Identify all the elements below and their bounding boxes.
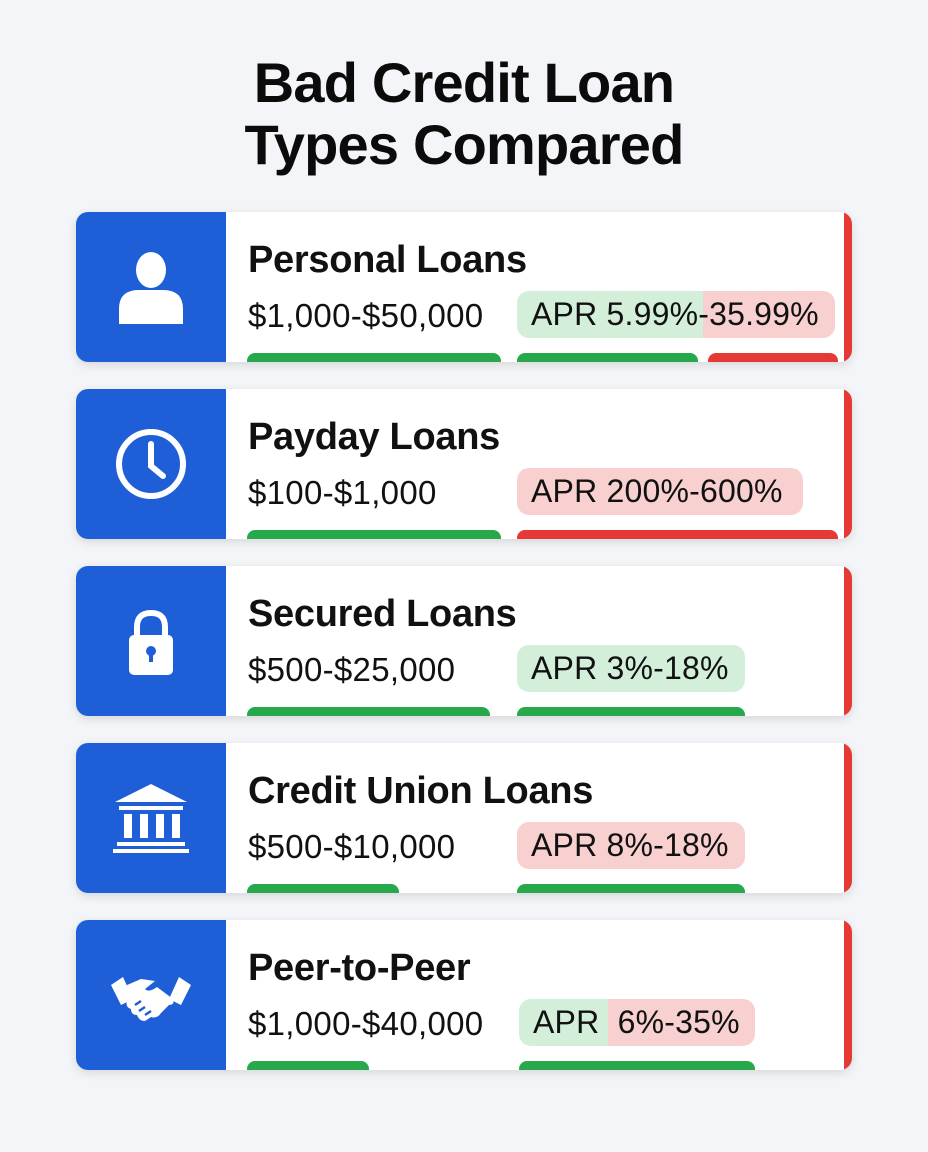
APR pill [517,291,835,338]
APR pill: APR 3%-18% [531,650,729,686]
APR pill: APR 6%-35% [533,1004,740,1040]
APR pill: APR 200%-600% [531,473,783,509]
panel: payday loans [76,389,852,539]
icon: handshake [76,920,226,1070]
title [244,51,684,176]
icon: clock [76,389,226,539]
heading: Secured Loans [248,593,517,635]
amount: $1,000-$50,000 [248,297,483,334]
amount: $100-$1,000 [248,474,437,511]
heading: Peer-to-Peer [248,947,470,989]
bars [247,353,838,362]
APR pill [517,468,803,515]
panel: credit union loans [76,743,852,893]
APR pill: APR 8%-18% [531,827,729,863]
bars [247,1061,755,1070]
APR pill [517,645,745,692]
icon: lock [76,566,226,716]
amount: $500-$25,000 [248,651,455,688]
APR pill [517,822,745,869]
icon: bank [76,743,226,893]
panel: peer-to-peer [76,920,852,1070]
bars [247,707,745,716]
heading: Credit Union Loans [248,770,593,812]
amount: $1,000-$40,000 [248,1005,483,1042]
bars [247,884,745,893]
bars [247,530,838,539]
title: Types Compared [244,113,684,176]
APR pill [519,999,755,1046]
icon: person [76,212,226,362]
panel: personal loans [76,212,852,362]
title: Bad Credit Loan [254,51,674,114]
panel: secured loans [76,566,852,716]
amount: $500-$10,000 [248,828,455,865]
heading: Payday Loans [248,416,500,458]
APR pill: APR 5.99%-35.99% [531,296,819,332]
heading: Personal Loans [248,239,527,281]
